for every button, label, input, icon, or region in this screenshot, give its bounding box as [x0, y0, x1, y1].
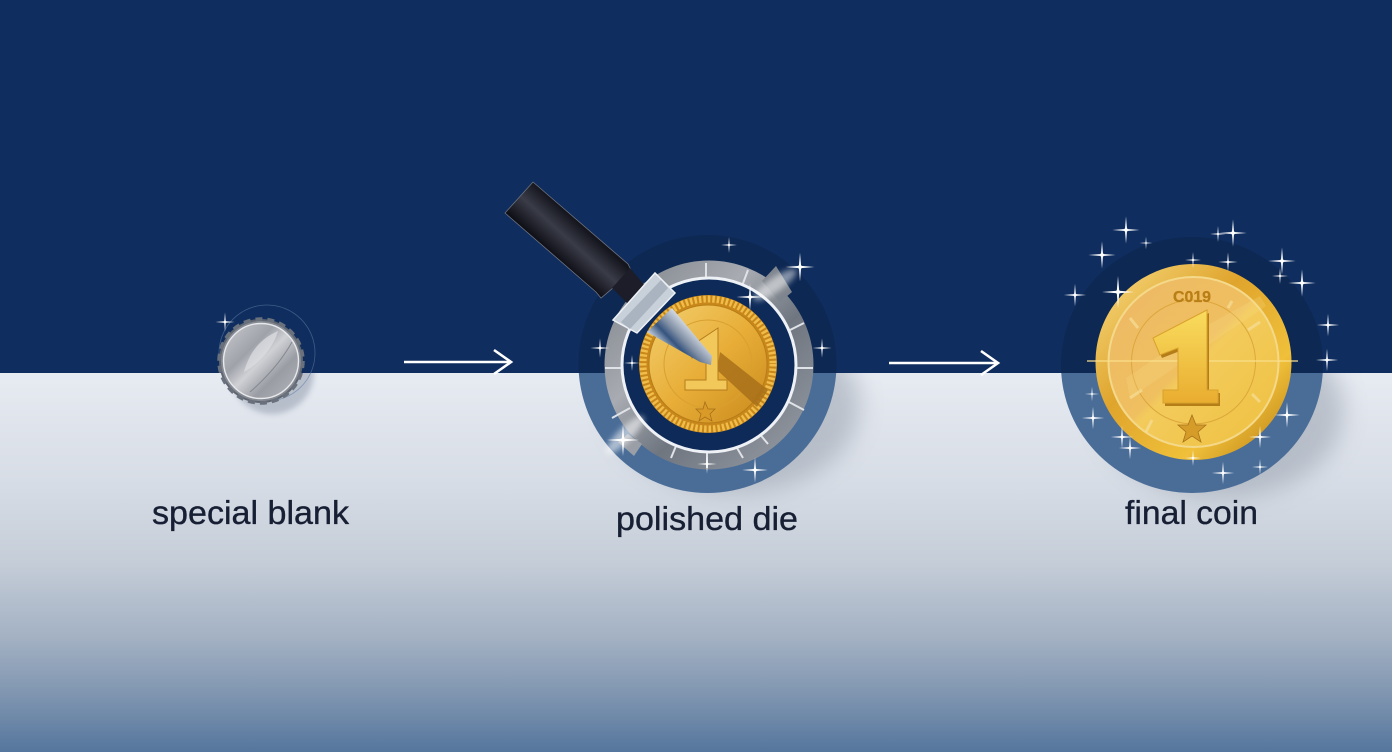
gold final coin body [1087, 264, 1298, 460]
arrow: die to final coin [889, 351, 998, 375]
outer steel blocks [762, 266, 792, 302]
tool collar [613, 273, 675, 333]
horizontal highlight line [1087, 360, 1298, 362]
sparkles on die [590, 237, 832, 483]
gold coin on die [639, 295, 777, 433]
background: navy upper wall [0, 0, 1392, 374]
die backing disc lower [578, 373, 836, 493]
final shadow [1130, 373, 1353, 506]
numeral 1 [1153, 310, 1218, 403]
die backing disc upper [578, 235, 836, 373]
die shadow [654, 373, 869, 501]
sparkles around final coin [1064, 216, 1339, 484]
star [1178, 415, 1206, 442]
numeral 1 on die coin [685, 328, 727, 390]
ring notches [605, 263, 813, 468]
final backing disc lower [1061, 373, 1323, 493]
polishing tool [505, 182, 712, 365]
tool handle [505, 182, 632, 298]
label: final coin: final coin [1125, 494, 1258, 531]
segmented steel ring [613, 269, 805, 461]
rim ticks [1130, 301, 1260, 432]
ring inner white line [622, 278, 796, 452]
step 1: special blank coin [215, 305, 315, 414]
tool cone tip [647, 308, 712, 365]
label: polished die: polished die [616, 500, 798, 537]
label: special blank: special blank [152, 494, 350, 531]
tool neck [612, 268, 645, 304]
arrow: blank to die [404, 350, 511, 374]
background: pale gradient floor [0, 373, 1392, 752]
final backing disc upper [1061, 237, 1323, 373]
numeral 1 shadow [1155, 313, 1220, 406]
step 3: final coin [1061, 216, 1344, 498]
coin year: C019 [1173, 289, 1211, 306]
step 2: polished die assembly [505, 182, 860, 493]
